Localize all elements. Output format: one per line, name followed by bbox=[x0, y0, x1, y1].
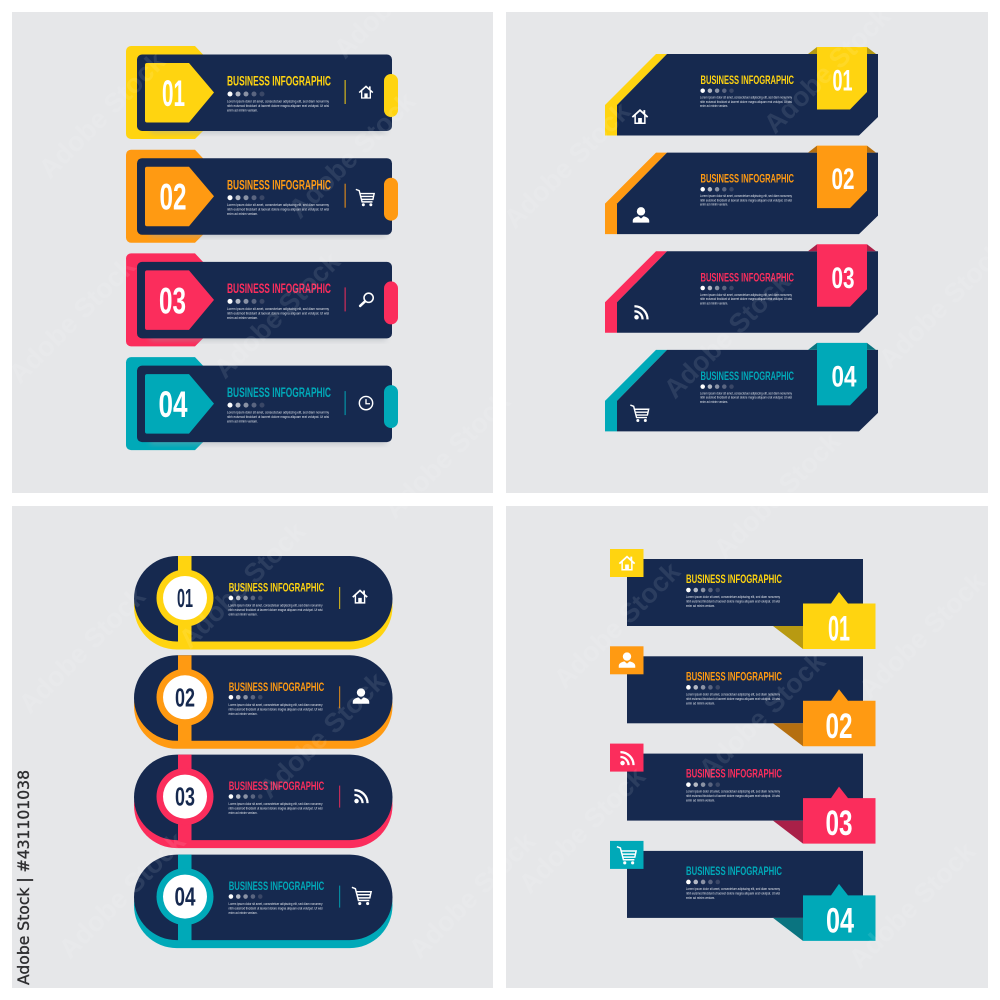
row 02 orange pill: BUSINESS INFOGRAPHIC bbox=[229, 680, 324, 694]
row 03 pink pill: nibh euismod tincidunt ut laoreet dolore magna aliquam erat volutpat. Ut wisi bbox=[228, 807, 323, 811]
row 04 teal pill bbox=[134, 855, 392, 948]
row 04 teal pill: 04 bbox=[174, 882, 196, 912]
row 01 yellow flag: Lorem ipsum dolor sit amet, consectetuer adipiscing elit, sed diam nonummy bbox=[686, 595, 780, 599]
row 04 teal pill: BUSINESS INFOGRAPHIC bbox=[229, 879, 324, 893]
row 03 pink tag: Lorem ipsum dolor sit amet, consectetuer adipiscing elit, sed diam nonummy bbox=[227, 306, 329, 311]
row 04 teal tag: 04 bbox=[158, 384, 188, 425]
row 04 teal banner: enim ad minim veniam. bbox=[700, 400, 728, 404]
row 01 yellow flag: nibh euismod tincidunt ut laoreet dolore magna aliquam erat volutpat. Ut wisi bbox=[686, 600, 780, 604]
watermark: Adobe Stock repeats: Adobe Stock bbox=[843, 836, 982, 974]
row 02 orange banner: enim ad minim veniam. bbox=[700, 203, 728, 207]
row 04 teal banner: nibh euismod tincidunt ut laoreet dolore magna aliquam erat volutpat. Ut wisi bbox=[700, 396, 792, 400]
row 02 orange tag: Lorem ipsum dolor sit amet, consectetuer adipiscing elit, sed diam nonummy bbox=[227, 202, 329, 207]
row 02 orange flag bbox=[610, 646, 876, 746]
row 01 yellow flag: enim ad minim veniam. bbox=[686, 604, 715, 608]
row 03 pink flag: BUSINESS INFOGRAPHIC bbox=[686, 767, 782, 781]
row 02 orange flag: nibh euismod tincidunt ut laoreet dolore magna aliquam erat volutpat. Ut wisi bbox=[686, 697, 780, 701]
watermark: Adobe Stock repeats: Adobe Stock bbox=[283, 86, 422, 224]
watermark: Adobe Stock repeats: Adobe Stock bbox=[498, 96, 637, 234]
row 03 pink pill: Lorem ipsum dolor sit amet, consectetuer adipiscing elit, sed diam nonummy bbox=[228, 802, 323, 806]
row 03 pink banner: 03 bbox=[832, 262, 854, 295]
row 02 orange tag: BUSINESS INFOGRAPHIC bbox=[227, 177, 331, 192]
row 01 yellow pill: 01 bbox=[177, 583, 193, 613]
row 03 pink pill: BUSINESS INFOGRAPHIC bbox=[229, 779, 324, 793]
row 04 teal flag: nibh euismod tincidunt ut laoreet dolore magna aliquam erat volutpat. Ut wisi bbox=[686, 891, 780, 895]
row 01 yellow pill: BUSINESS INFOGRAPHIC bbox=[229, 580, 324, 594]
row 04 teal banner: 04 bbox=[832, 360, 857, 393]
watermark: Adobe Stock repeats: Adobe Stock bbox=[758, 1, 897, 139]
row 02 orange banner bbox=[605, 146, 878, 234]
row 01 yellow tag: enim ad minim veniam. bbox=[227, 108, 258, 112]
row 03 pink banner: Lorem ipsum dolor sit amet, consectetuer adipiscing elit, sed diam nonummy bbox=[700, 293, 792, 297]
row 03 pink pill bbox=[134, 755, 392, 848]
row 01 yellow pill: enim ad minim veniam. bbox=[228, 612, 258, 616]
panel: bottom-right flag boxes bbox=[506, 506, 988, 988]
row 03 pink tag: enim ad minim veniam. bbox=[227, 315, 258, 320]
row 03 pink tag: BUSINESS INFOGRAPHIC bbox=[227, 281, 331, 296]
row 03 pink pill: 03 bbox=[175, 782, 195, 812]
row 03 pink flag: 03 bbox=[826, 804, 852, 843]
row 02 orange pill bbox=[134, 655, 392, 749]
row 03 pink tag: 03 bbox=[159, 280, 186, 321]
row 01 yellow tag: BUSINESS INFOGRAPHIC bbox=[227, 74, 331, 89]
row 03 pink banner: enim ad minim veniam. bbox=[700, 301, 728, 305]
row 02 orange flag: BUSINESS INFOGRAPHIC bbox=[686, 669, 782, 683]
row 04 teal flag: enim ad minim veniam. bbox=[686, 896, 715, 900]
row 02 orange banner: Lorem ipsum dolor sit amet, consectetuer adipiscing elit, sed diam nonummy bbox=[700, 194, 792, 198]
row 03 pink banner: BUSINESS INFOGRAPHIC bbox=[700, 270, 794, 284]
row 01 yellow banner: BUSINESS INFOGRAPHIC bbox=[700, 73, 794, 87]
row 04 teal pill: nibh euismod tincidunt ut laoreet dolore magna aliquam erat volutpat. Ut wisi bbox=[228, 907, 323, 911]
row 02 orange banner: nibh euismod tincidunt ut laoreet dolore magna aliquam erat volutpat. Ut wisi bbox=[700, 198, 792, 202]
watermark: Adobe Stock repeats: Adobe Stock bbox=[53, 826, 192, 964]
row 01 yellow banner: nibh euismod tincidunt ut laoreet dolore magna aliquam erat volutpat. Ut wisi bbox=[700, 100, 792, 104]
row 03 pink banner bbox=[605, 244, 878, 333]
row 04 teal flag: 04 bbox=[826, 901, 854, 940]
row 04 teal banner: BUSINESS INFOGRAPHIC bbox=[700, 369, 794, 383]
row 02 orange tag: 02 bbox=[160, 177, 186, 218]
row 04 teal flag: Lorem ipsum dolor sit amet, consectetuer adipiscing elit, sed diam nonummy bbox=[686, 887, 780, 891]
row 01 yellow flag: 01 bbox=[828, 610, 850, 648]
panel: top-left arrow tags bbox=[12, 12, 493, 493]
row 02 orange flag: 02 bbox=[826, 707, 852, 746]
row 04 teal tag: enim ad minim veniam. bbox=[227, 419, 258, 424]
watermark: Adobe Stock repeats: Adobe Stock bbox=[693, 646, 832, 784]
watermark: Adobe Stock repeats: Adobe Stock bbox=[658, 266, 797, 404]
watermark: Adobe Stock repeats: Adobe Stock bbox=[548, 556, 687, 694]
row 04 teal tag: Lorem ipsum dolor sit amet, consectetuer adipiscing elit, sed diam nonummy bbox=[227, 410, 329, 415]
row 01 yellow banner: Lorem ipsum dolor sit amet, consectetuer adipiscing elit, sed diam nonummy bbox=[700, 96, 792, 100]
row 04 teal tag: nibh euismod tincidunt ut laoreet dolore magna aliquam erat volutpat. Ut wisi bbox=[227, 414, 329, 419]
row 01 yellow tag: 01 bbox=[162, 73, 185, 114]
watermark: Adobe Stock repeats: Adobe Stock bbox=[403, 826, 542, 964]
row 04 teal tag bbox=[126, 357, 398, 450]
row 04 teal banner: Lorem ipsum dolor sit amet, consectetuer adipiscing elit, sed diam nonummy bbox=[700, 391, 792, 395]
panel: top-right ribbon banners bbox=[506, 12, 988, 493]
row 04 teal tag: BUSINESS INFOGRAPHIC bbox=[227, 385, 331, 400]
row 02 orange tag bbox=[126, 150, 398, 243]
row 04 teal pill: enim ad minim veniam. bbox=[228, 911, 258, 915]
row 02 orange tag: nibh euismod tincidunt ut laoreet dolore magna aliquam erat volutpat. Ut wisi bbox=[227, 207, 329, 212]
row 02 orange flag: enim ad minim veniam. bbox=[686, 701, 715, 705]
row 02 orange tag: enim ad minim veniam. bbox=[227, 211, 258, 216]
row 02 orange banner: 02 bbox=[832, 163, 854, 196]
row 03 pink tag: nibh euismod tincidunt ut laoreet dolore magna aliquam erat volutpat. Ut wisi bbox=[227, 310, 329, 315]
watermark: Adobe Stock repeats: Adobe Stock bbox=[378, 386, 517, 524]
row 03 pink tag bbox=[126, 253, 398, 346]
row 03 pink flag: nibh euismod tincidunt ut laoreet dolore magna aliquam erat volutpat. Ut wisi bbox=[686, 794, 780, 798]
row 01 yellow flag bbox=[610, 549, 876, 649]
row 01 yellow flag: BUSINESS INFOGRAPHIC bbox=[686, 572, 782, 586]
row 03 pink banner: nibh euismod tincidunt ut laoreet dolore magna aliquam erat volutpat. Ut wisi bbox=[700, 297, 792, 301]
row 03 pink flag: enim ad minim veniam. bbox=[686, 799, 715, 803]
row 04 teal pill: Lorem ipsum dolor sit amet, consectetuer adipiscing elit, sed diam nonummy bbox=[228, 902, 323, 906]
watermark: Adobe Stock repeats: Adobe Stock bbox=[208, 246, 347, 384]
row 01 yellow tag: nibh euismod tincidunt ut laoreet dolore magna aliquam erat volutpat. Ut wisi bbox=[227, 103, 329, 108]
watermark: Adobe Stock repeats: Adobe Stock bbox=[173, 516, 312, 654]
row 02 orange pill: 02 bbox=[175, 682, 195, 712]
row 01 yellow pill: Lorem ipsum dolor sit amet, consectetuer adipiscing elit, sed diam nonummy bbox=[228, 604, 323, 608]
stock id caption: Adobe Stock | #431101038 bbox=[14, 770, 33, 985]
row 04 teal banner bbox=[605, 343, 878, 431]
row 03 pink flag bbox=[610, 744, 876, 844]
watermark: Adobe Stock repeats: Adobe Stock bbox=[33, 46, 172, 184]
row 03 pink flag: Lorem ipsum dolor sit amet, consectetuer adipiscing elit, sed diam nonummy bbox=[686, 790, 780, 794]
row 01 yellow banner: enim ad minim veniam. bbox=[700, 104, 728, 108]
row 01 yellow banner: 01 bbox=[832, 64, 852, 98]
watermark: Adobe Stock repeats: Adobe Stock bbox=[13, 581, 152, 719]
watermark: Adobe Stock repeats: Adobe Stock bbox=[853, 566, 992, 704]
row 02 orange pill: enim ad minim veniam. bbox=[228, 712, 258, 716]
row 01 yellow tag bbox=[126, 46, 398, 139]
row 01 yellow tag: Lorem ipsum dolor sit amet, consectetuer adipiscing elit, sed diam nonummy bbox=[227, 98, 329, 104]
row 01 yellow pill bbox=[134, 556, 392, 650]
row 02 orange banner: BUSINESS INFOGRAPHIC bbox=[700, 172, 794, 186]
row 01 yellow pill: nibh euismod tincidunt ut laoreet dolore magna aliquam erat volutpat. Ut wisi bbox=[228, 608, 323, 612]
watermark: Adobe Stock repeats: Adobe Stock bbox=[3, 251, 142, 389]
row 04 teal flag: BUSINESS INFOGRAPHIC bbox=[686, 864, 782, 878]
row 03 pink pill: enim ad minim veniam. bbox=[228, 811, 258, 815]
watermark: Adobe Stock repeats: Adobe Stock bbox=[708, 426, 847, 564]
row 02 orange pill: nibh euismod tincidunt ut laoreet dolore magna aliquam erat volutpat. Ut wisi bbox=[228, 707, 323, 711]
row 02 orange pill: Lorem ipsum dolor sit amet, consectetuer adipiscing elit, sed diam nonummy bbox=[228, 703, 323, 707]
row 02 orange flag: Lorem ipsum dolor sit amet, consectetuer adipiscing elit, sed diam nonummy bbox=[686, 692, 780, 696]
panel: bottom-left pill cards bbox=[12, 506, 493, 988]
watermark: Adobe Stock repeats: Adobe Stock bbox=[253, 666, 392, 804]
row 04 teal flag bbox=[610, 841, 876, 941]
row 01 yellow banner bbox=[605, 47, 878, 136]
watermark: Adobe Stock repeats: Adobe Stock bbox=[513, 761, 652, 899]
